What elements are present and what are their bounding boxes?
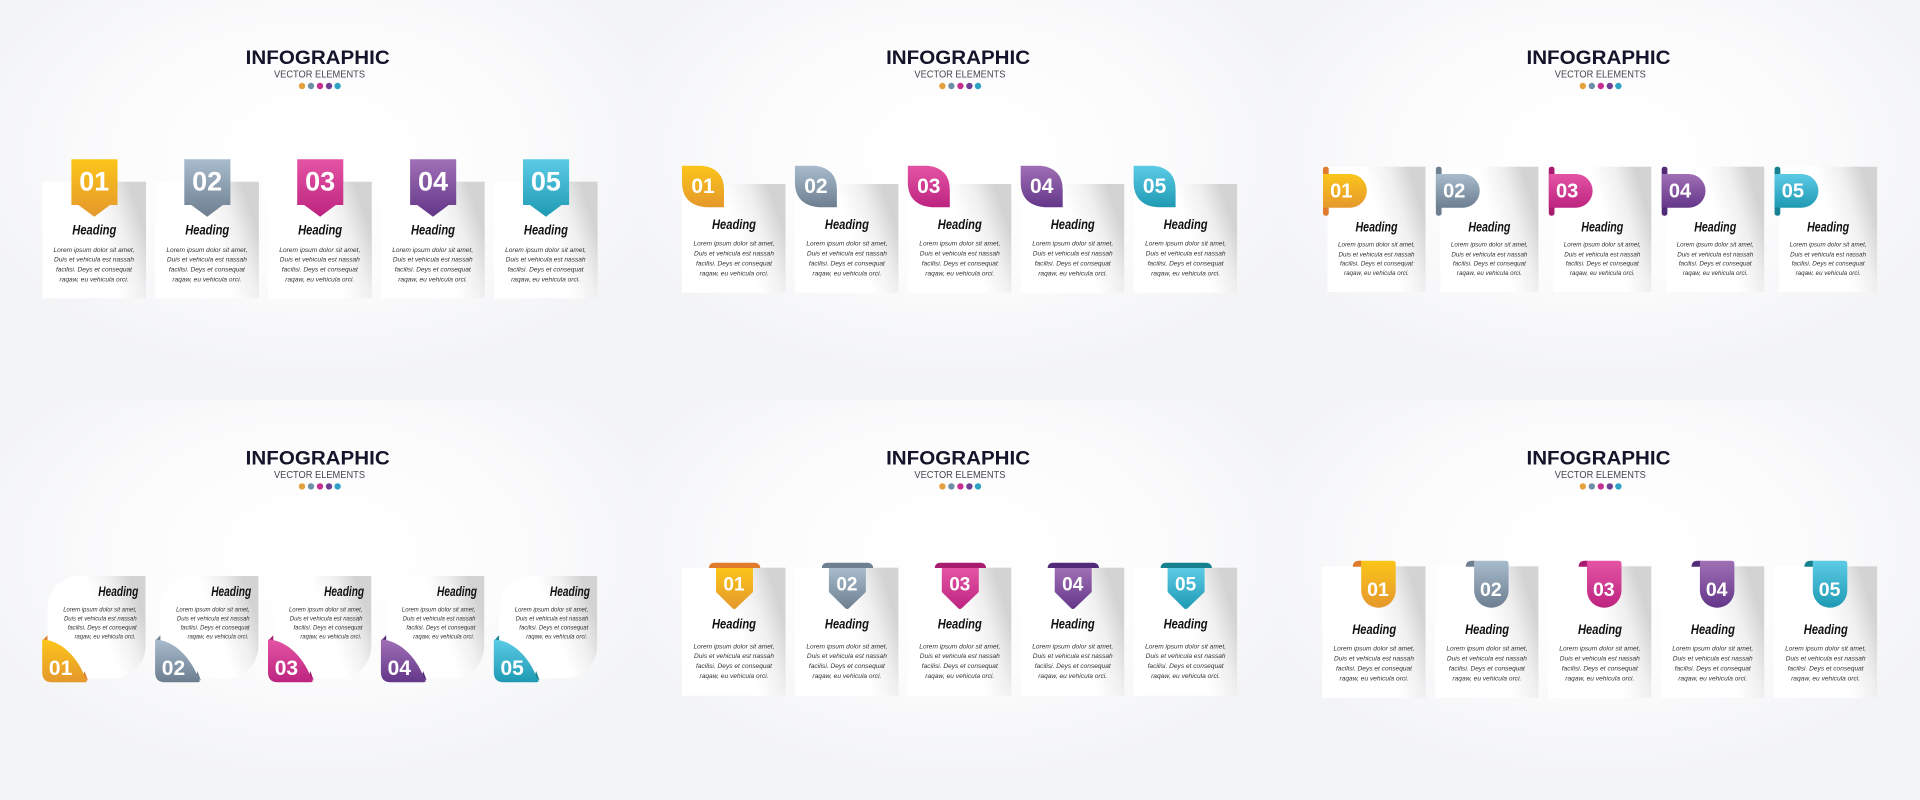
body text 03: Duis et vehicula est nassah [1560, 655, 1640, 662]
body text 02: Duis et vehicula est nassah [167, 257, 247, 264]
title block: VECTOR ELEMENTS [274, 70, 365, 80]
body text 04: facilisi. Deys et consequat [1675, 665, 1752, 672]
card 03 [268, 159, 372, 298]
body text 05 [515, 607, 589, 641]
card 03 [908, 563, 1011, 696]
badge 04 [1021, 166, 1063, 207]
card 04 [1661, 561, 1764, 698]
body text 03: Lorem ipsum dolor sit amet, [289, 607, 363, 614]
title block [246, 47, 390, 89]
heading 05: Heading [1164, 616, 1208, 632]
body text 03 [1559, 646, 1640, 682]
body text 05: Lorem ipsum dolor sit amet, [1785, 646, 1866, 653]
heading 04: Heading [437, 584, 478, 599]
number 04: 04 [388, 657, 411, 680]
heading 04: Heading [1051, 616, 1095, 632]
body text 04: facilisi. Deys et consequat [1035, 260, 1112, 267]
number 04: 04 [1706, 579, 1728, 601]
card 03 [268, 576, 371, 682]
card 04 [1021, 166, 1124, 293]
body text 04: raqaw, eu vehicula orci. [1683, 270, 1748, 277]
card 05 [1134, 563, 1237, 696]
body text 03 [919, 643, 1000, 680]
badge 04 [1048, 563, 1099, 609]
number 04: 04 [1062, 575, 1084, 596]
panel: pointer tag design [42, 47, 598, 298]
title block: INFOGRAPHIC [246, 447, 390, 469]
body text 04: facilisi. Deys et consequat [1035, 663, 1112, 670]
card 01 [1323, 167, 1426, 292]
number 05: 05 [501, 657, 524, 680]
body text 02 [806, 241, 888, 277]
body text 01: raqaw, eu vehicula orci. [1340, 675, 1409, 682]
heading 03: Heading [938, 616, 982, 632]
number 04: 04 [1669, 181, 1692, 203]
card 01 [42, 576, 146, 682]
badge 04 [1662, 167, 1706, 216]
badge 01 [1323, 167, 1367, 216]
body text 05: facilisi. Deys et consequat [1788, 665, 1865, 672]
heading 05: Heading [1164, 217, 1208, 232]
body text 02: raqaw, eu vehicula orci. [812, 270, 882, 277]
body text 05: facilisi. Deys et consequat [1148, 260, 1225, 267]
title block: VECTOR ELEMENTS [1555, 470, 1646, 481]
number 03: 03 [1593, 579, 1615, 601]
badge 05 [1134, 166, 1176, 207]
body text 04 [1032, 643, 1113, 680]
heading 05: Heading [1807, 220, 1850, 234]
number 03: 03 [275, 657, 298, 680]
card 02 [155, 159, 259, 298]
body text 05: Lorem ipsum dolor sit amet, [1790, 242, 1867, 249]
body text 01: Lorem ipsum dolor sit amet, [54, 247, 135, 254]
title block [1526, 47, 1670, 89]
number 04: 04 [1030, 175, 1054, 198]
body text 03: raqaw, eu vehicula orci. [1565, 675, 1634, 682]
panel: leaf tag design [682, 47, 1237, 293]
body text 04: Duis et vehicula est nassah [393, 257, 473, 264]
body text 01: raqaw, eu vehicula orci. [75, 634, 136, 641]
body text 03: Lorem ipsum dolor sit amet, [919, 643, 1000, 650]
heading 03: Heading [1581, 220, 1624, 234]
body text 02: Duis et vehicula est nassah [807, 653, 887, 660]
heading 02: Heading [1468, 220, 1511, 234]
body text 05: Duis et vehicula est nassah [1786, 655, 1866, 662]
body text 02: Lorem ipsum dolor sit amet, [806, 241, 888, 248]
badge 02 [184, 159, 230, 217]
heading 04: Heading [411, 222, 456, 238]
heading 01: Heading [72, 222, 117, 238]
body text 05 [1145, 241, 1226, 277]
badge 03 [1549, 167, 1593, 216]
body text 05: raqaw, eu vehicula orci. [1791, 675, 1860, 682]
body text 02: Duis et vehicula est nassah [1447, 655, 1527, 662]
card 05 [494, 576, 597, 682]
number 01: 01 [49, 657, 73, 680]
body text 01 [1334, 646, 1415, 682]
badge 05 [1775, 167, 1818, 216]
body text 05: facilisi. Deys et consequat [1148, 663, 1225, 670]
number 02: 02 [1443, 181, 1465, 203]
heading 03: Heading [298, 222, 343, 238]
heading 04: Heading [1691, 622, 1736, 637]
body text 02: Lorem ipsum dolor sit amet, [1451, 242, 1528, 249]
body text 05: raqaw, eu vehicula orci. [1151, 673, 1220, 680]
card 03 [1548, 561, 1651, 698]
heading 05: Heading [1804, 622, 1848, 637]
number 01: 01 [1330, 181, 1352, 203]
body text 05: Lorem ipsum dolor sit amet, [505, 247, 586, 254]
body text 01: facilisi. Deys et consequat [696, 260, 773, 267]
body text 05: facilisi. Deys et consequat [508, 267, 585, 274]
body text 01: Duis et vehicula est nassah [694, 653, 774, 660]
body text 02: facilisi. Deys et consequat [809, 260, 886, 267]
heading 01: Heading [1352, 622, 1397, 637]
body text 03: Duis et vehicula est nassah [1564, 251, 1641, 258]
card 04 [381, 159, 485, 298]
title block [246, 447, 390, 490]
body text 02 [166, 247, 248, 284]
card 04 [1021, 563, 1124, 696]
title block: INFOGRAPHIC [886, 47, 1030, 69]
title block: VECTOR ELEMENTS [914, 470, 1006, 481]
body text 03: Lorem ipsum dolor sit amet, [279, 247, 360, 254]
body text 04 [1032, 241, 1113, 277]
body text 02 [1446, 646, 1528, 682]
body text 03: Lorem ipsum dolor sit amet, [1564, 242, 1641, 249]
body text 04: Duis et vehicula est nassah [1677, 251, 1753, 258]
body text 02: raqaw, eu vehicula orci. [188, 634, 249, 641]
body text 01: Duis et vehicula est nassah [694, 250, 774, 257]
number 02: 02 [836, 575, 857, 596]
number 02: 02 [804, 175, 828, 198]
body text 04 [1672, 646, 1753, 682]
card 05 [1134, 166, 1237, 293]
badge 05 [523, 159, 569, 217]
body text 03: facilisi. Deys et consequat [922, 663, 999, 670]
body text 02: Duis et vehicula est nassah [1451, 251, 1528, 258]
body text 03: raqaw, eu vehicula orci. [1570, 270, 1635, 277]
body text 04: Lorem ipsum dolor sit amet, [402, 607, 476, 614]
number 03: 03 [949, 575, 970, 596]
heading 01: Heading [712, 616, 757, 632]
body text 03: Duis et vehicula est nassah [290, 616, 363, 623]
body text 02: facilisi. Deys et consequat [181, 625, 251, 632]
number 01: 01 [1367, 579, 1389, 601]
body text 02 [1451, 242, 1528, 277]
body text 02: facilisi. Deys et consequat [169, 267, 246, 274]
body text 04: Duis et vehicula est nassah [1033, 250, 1113, 257]
body text 04 [392, 247, 473, 284]
card 05 [1774, 561, 1877, 698]
number 05: 05 [531, 166, 561, 196]
body text 04: Lorem ipsum dolor sit amet, [1032, 643, 1113, 650]
card 01 [42, 159, 146, 298]
body text 03 [1564, 242, 1641, 277]
panel: rounded bookmark design [1322, 447, 1877, 698]
card 04 [381, 576, 484, 682]
body text 05: Duis et vehicula est nassah [1146, 653, 1226, 660]
body text 01: facilisi. Deys et consequat [68, 625, 138, 632]
body text 02: Duis et vehicula est nassah [807, 250, 887, 257]
body text 05: Duis et vehicula est nassah [1790, 251, 1866, 258]
body text 01: facilisi. Deys et consequat [56, 267, 133, 274]
body text 05: Duis et vehicula est nassah [506, 257, 586, 264]
body text 05: Duis et vehicula est nassah [1146, 250, 1226, 257]
body text 02: raqaw, eu vehicula orci. [172, 277, 242, 284]
body text 04: Lorem ipsum dolor sit amet, [1032, 241, 1113, 248]
body text 04: raqaw, eu vehicula orci. [413, 634, 474, 641]
badge 01 [682, 166, 724, 207]
heading 02: Heading [825, 616, 870, 632]
body text 05: Lorem ipsum dolor sit amet, [1145, 241, 1226, 248]
badge 01 [709, 563, 760, 609]
badge 01 [71, 159, 118, 217]
body text 03: Lorem ipsum dolor sit amet, [1559, 646, 1640, 653]
body text 04: Lorem ipsum dolor sit amet, [1677, 242, 1754, 249]
title block [1526, 447, 1670, 490]
body text 04: Duis et vehicula est nassah [1673, 655, 1753, 662]
body text 01: raqaw, eu vehicula orci. [60, 277, 129, 284]
body text 05: raqaw, eu vehicula orci. [1796, 270, 1861, 277]
body text 04: raqaw, eu vehicula orci. [1038, 673, 1107, 680]
number 05: 05 [1782, 181, 1804, 203]
body text 05: Duis et vehicula est nassah [516, 616, 589, 623]
body text 01: Lorem ipsum dolor sit amet, [694, 643, 775, 650]
body text 03: Duis et vehicula est nassah [920, 250, 1000, 257]
body text 03: Duis et vehicula est nassah [920, 653, 1000, 660]
body text 05: raqaw, eu vehicula orci. [526, 634, 587, 641]
body text 04: Lorem ipsum dolor sit amet, [392, 247, 473, 254]
badge 02 [795, 166, 837, 207]
body text 05 [505, 247, 586, 284]
heading 02: Heading [185, 222, 230, 238]
body text 05: facilisi. Deys et consequat [1792, 261, 1866, 268]
body text 03: facilisi. Deys et consequat [1566, 261, 1640, 268]
body text 04: Lorem ipsum dolor sit amet, [1672, 646, 1753, 653]
heading 04: Heading [1051, 217, 1095, 232]
panel: ribbon arrow design [682, 447, 1237, 696]
body text 01 [63, 607, 138, 641]
body text 03: raqaw, eu vehicula orci. [300, 634, 362, 641]
number 01: 01 [79, 166, 109, 196]
badge 05 [494, 635, 540, 682]
number 03: 03 [1556, 181, 1578, 203]
body text 03 [279, 247, 360, 284]
body text 03: raqaw, eu vehicula orci. [925, 270, 994, 277]
body text 04: raqaw, eu vehicula orci. [398, 277, 467, 284]
number 02: 02 [1480, 579, 1502, 601]
badge 05 [1804, 561, 1847, 608]
badge 05 [1161, 563, 1212, 609]
body text 02: raqaw, eu vehicula orci. [812, 673, 882, 680]
body text 03 [289, 607, 364, 641]
number 02: 02 [162, 657, 185, 680]
card 02 [1436, 167, 1538, 292]
body text 01: Duis et vehicula est nassah [64, 616, 137, 623]
title block [886, 447, 1030, 490]
body text 01: facilisi. Deys et consequat [1336, 665, 1413, 672]
card 04 [1662, 167, 1764, 292]
badge 02 [155, 635, 201, 682]
badge 04 [381, 635, 427, 682]
body text 02: Lorem ipsum dolor sit amet, [166, 247, 248, 254]
body text 04: Duis et vehicula est nassah [403, 616, 476, 623]
card 01 [682, 166, 786, 293]
heading 01: Heading [1356, 220, 1398, 234]
heading 01: Heading [98, 584, 139, 599]
badge 03 [1579, 561, 1622, 608]
number 04: 04 [418, 166, 448, 196]
heading 02: Heading [825, 217, 870, 232]
number 05: 05 [1819, 579, 1841, 601]
body text 04: facilisi. Deys et consequat [406, 625, 476, 632]
body text 01: Lorem ipsum dolor sit amet, [694, 241, 775, 248]
badge 01 [1353, 561, 1396, 608]
body text 02: raqaw, eu vehicula orci. [1457, 270, 1522, 277]
card 02 [1435, 561, 1538, 698]
body text 05 [1145, 643, 1226, 680]
body text 03: facilisi. Deys et consequat [1562, 665, 1639, 672]
body text 05: raqaw, eu vehicula orci. [511, 277, 580, 284]
body text 01 [694, 241, 775, 277]
body text 03 [919, 241, 1000, 277]
body text 04 [1677, 242, 1754, 277]
body text 04 [402, 607, 476, 641]
body text 03: facilisi. Deys et consequat [282, 267, 359, 274]
number 05: 05 [1175, 575, 1197, 596]
body text 04: facilisi. Deys et consequat [1679, 261, 1753, 268]
body text 02: Lorem ipsum dolor sit amet, [1446, 646, 1528, 653]
body text 02: Lorem ipsum dolor sit amet, [806, 643, 888, 650]
heading 03: Heading [1578, 622, 1623, 637]
title block: INFOGRAPHIC [1527, 447, 1671, 469]
number 01: 01 [691, 175, 715, 198]
body text 02: raqaw, eu vehicula orci. [1452, 675, 1522, 682]
heading 03: Heading [938, 217, 982, 232]
body text 02: Lorem ipsum dolor sit amet, [176, 607, 250, 614]
body text 02: Duis et vehicula est nassah [177, 616, 250, 623]
card 03 [1549, 167, 1651, 292]
card 05 [494, 159, 598, 298]
number 05: 05 [1143, 175, 1167, 198]
body text 05: facilisi. Deys et consequat [519, 625, 589, 632]
title block: VECTOR ELEMENTS [914, 70, 1006, 80]
body text 02: facilisi. Deys et consequat [1453, 261, 1527, 268]
body text 05 [1785, 646, 1866, 682]
panel: side tab design [1323, 47, 1877, 292]
title block: INFOGRAPHIC [1527, 47, 1671, 69]
body text 05 [1790, 242, 1867, 277]
body text 03: facilisi. Deys et consequat [294, 625, 364, 632]
badge 03 [935, 563, 986, 609]
body text 01: Lorem ipsum dolor sit amet, [1334, 646, 1415, 653]
body text 05: Lorem ipsum dolor sit amet, [1145, 643, 1226, 650]
body text 01 [1338, 242, 1415, 277]
heading 03: Heading [324, 584, 365, 599]
title block: INFOGRAPHIC [886, 447, 1030, 469]
card 02 [795, 563, 898, 696]
number 02: 02 [192, 166, 222, 196]
badge 04 [410, 159, 456, 217]
title block [886, 47, 1030, 89]
number 03: 03 [305, 166, 335, 196]
title block: VECTOR ELEMENTS [1555, 70, 1646, 80]
body text 02 [806, 643, 888, 680]
body text 01: Duis et vehicula est nassah [1334, 655, 1414, 662]
body text 01: Duis et vehicula est nassah [1338, 251, 1415, 258]
number 03: 03 [917, 175, 940, 198]
badge 03 [297, 159, 343, 217]
title block: VECTOR ELEMENTS [274, 470, 365, 481]
body text 01: Duis et vehicula est nassah [54, 257, 134, 264]
body text 04: Duis et vehicula est nassah [1033, 653, 1113, 660]
heading 01: Heading [712, 217, 757, 232]
panel: corner quarter-circle design [42, 447, 597, 682]
body text 04: raqaw, eu vehicula orci. [1678, 675, 1747, 682]
body text 03: facilisi. Deys et consequat [922, 260, 999, 267]
body text 01: raqaw, eu vehicula orci. [700, 270, 769, 277]
body text 03: Lorem ipsum dolor sit amet, [919, 241, 1000, 248]
body text 03: raqaw, eu vehicula orci. [925, 673, 994, 680]
body text 01: facilisi. Deys et consequat [696, 663, 773, 670]
number 01: 01 [723, 575, 745, 596]
body text 01: raqaw, eu vehicula orci. [1344, 270, 1409, 277]
body text 05: Lorem ipsum dolor sit amet, [515, 607, 588, 614]
body text 01 [694, 643, 775, 680]
badge 02 [1436, 167, 1480, 216]
card 02 [795, 166, 898, 293]
badge 03 [908, 166, 950, 207]
card 01 [682, 563, 786, 696]
badge 03 [268, 635, 314, 682]
badge 01 [42, 635, 88, 682]
body text 02: facilisi. Deys et consequat [1449, 665, 1526, 672]
card 02 [155, 576, 258, 682]
heading 05: Heading [524, 222, 569, 238]
heading 02: Heading [211, 584, 252, 599]
body text 01: facilisi. Deys et consequat [1340, 261, 1414, 268]
heading 02: Heading [1465, 622, 1510, 637]
body text 01 [54, 247, 135, 284]
heading 04: Heading [1694, 220, 1737, 234]
badge 04 [1692, 561, 1734, 608]
body text 05: raqaw, eu vehicula orci. [1151, 270, 1220, 277]
body text 02: facilisi. Deys et consequat [809, 663, 886, 670]
body text 04: facilisi. Deys et consequat [395, 267, 472, 274]
body text 04: raqaw, eu vehicula orci. [1038, 270, 1107, 277]
badge 02 [1466, 561, 1509, 608]
card 01 [1322, 561, 1426, 698]
card 03 [908, 166, 1011, 293]
badge 02 [822, 563, 873, 609]
body text 01: Lorem ipsum dolor sit amet, [63, 607, 137, 614]
body text 01: Lorem ipsum dolor sit amet, [1338, 242, 1415, 249]
body text 03: raqaw, eu vehicula orci. [285, 277, 354, 284]
body text 03: Duis et vehicula est nassah [280, 257, 360, 264]
card 05 [1775, 167, 1877, 292]
body text 01: raqaw, eu vehicula orci. [700, 673, 769, 680]
title block: INFOGRAPHIC [246, 47, 390, 69]
heading 05: Heading [550, 584, 590, 599]
body text 02 [176, 607, 251, 641]
